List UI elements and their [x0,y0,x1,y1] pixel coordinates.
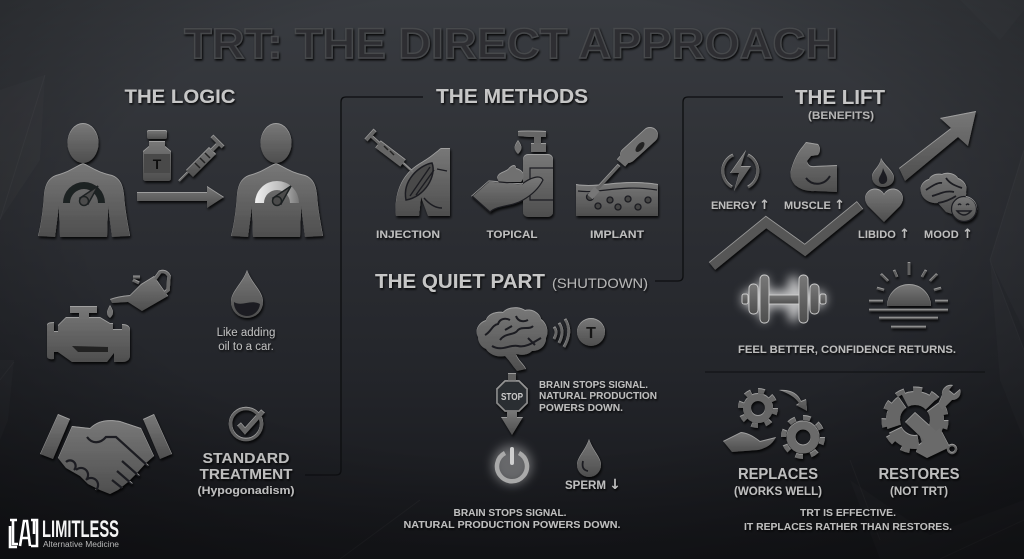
text: standard treatment: STANDARD [202,451,290,467]
icon: person with low gauge [38,123,130,237]
label: restores: RESTORES [878,466,960,483]
icon: brain [477,307,547,371]
icon: stop sign with arrow: STOP [501,392,523,403]
icon: T circle: T [586,325,596,342]
icon: T circle [577,318,605,346]
icon: dumbbell [742,275,826,323]
icon: check circle [230,408,263,440]
subheading: shutdown: (SHUTDOWN) [552,275,648,291]
logo mark [10,520,37,547]
text: brain stops signal note: BRAIN STOPS SIGNAL. [539,380,648,391]
icon: syringe [179,136,223,181]
icon: flame heart [865,158,903,222]
title: TRT: THE DIRECT APPROACH [184,20,838,68]
icon: replaces gears and hand [723,390,822,456]
icon: sunrise [869,262,948,327]
text: shutdown caption: NATURAL PRODUCTION POWERS DOWN. [404,519,621,531]
label: replaces: REPLACES [738,466,818,483]
label: energy up: ENERGY ↑ [711,198,770,213]
divider [705,371,985,373]
text: brain stops signal note: NATURAL PRODUCTION [539,391,657,402]
icon: injection [366,130,450,216]
text: oil analogy: Like adding [217,327,275,339]
icon: brain with smile [921,173,976,222]
icon: handshake [40,414,172,494]
icon: stop sign with arrow [497,373,527,435]
connector: quiet part to lift [655,97,783,281]
icon: topical [472,130,553,217]
text: confidence returns: FEEL BETTER, CONFIDENCE RETURNS. [738,344,956,356]
text: standard treatment: (Hypogonadism) [198,485,295,497]
logo tagline: Alternative Medicine [43,540,120,549]
heading: the logic: THE LOGIC [124,87,236,108]
panel: the lift [711,87,976,356]
label: mood up: MOOD ↑ [924,227,973,242]
icon: oil can [107,272,169,318]
icon: T bottle [143,130,171,181]
icon: person with high gauge [231,123,323,237]
icon: muscle [790,142,837,192]
icon: oil drop [231,270,263,318]
arrow: treatment [137,186,224,208]
icon: energy [723,150,758,191]
text: standard treatment: TREATMENT [200,467,293,483]
text: trt conclusion: TRT IS EFFECTIVE. [800,507,896,519]
panel: the quiet part [375,271,657,531]
icon: sperm drop [577,439,601,477]
panel: the methods [366,86,658,241]
logo [10,516,120,549]
heading: the quiet part: THE QUIET PART [375,271,545,293]
icon: restores broken gear and wrench [884,385,961,458]
heading: the lift: THE LIFT [795,87,885,109]
label: muscle up: MUSCLE ↑ [784,198,845,213]
label: implant: IMPLANT [590,229,644,241]
label: not trt: (NOT TRT) [890,486,948,498]
icon: power button [492,445,532,485]
icon: engine [47,306,130,362]
icon: sound waves [554,319,569,347]
label: libido up: LIBIDO ↑ [858,227,910,242]
logo wordmark: LIMITLESS [42,516,119,543]
heading: the methods: THE METHODS [436,86,588,108]
text: brain stops signal note: POWERS DOWN. [539,403,623,414]
text: oil analogy: oil to a car. [218,341,274,353]
label: injection: INJECTION [376,229,440,241]
icon: implant [576,135,658,216]
subheading: benefits: (BENEFITS) [808,110,874,122]
icon: T bottle: T [153,156,162,172]
connector: logic to methods [305,97,423,475]
panel: the logic [38,87,323,497]
text: shutdown caption: BRAIN STOPS SIGNAL. [454,507,567,519]
label: topical: TOPICAL [486,229,538,241]
chart: rising line with arrow [712,111,976,266]
label: works well: (WORKS WELL) [734,486,822,498]
panel: replaces vs restores [723,385,961,533]
text: trt conclusion: IT REPLACES RATHER THAN RESTORES. [744,521,952,533]
label: sperm down: SPERM ↓ [565,477,621,493]
